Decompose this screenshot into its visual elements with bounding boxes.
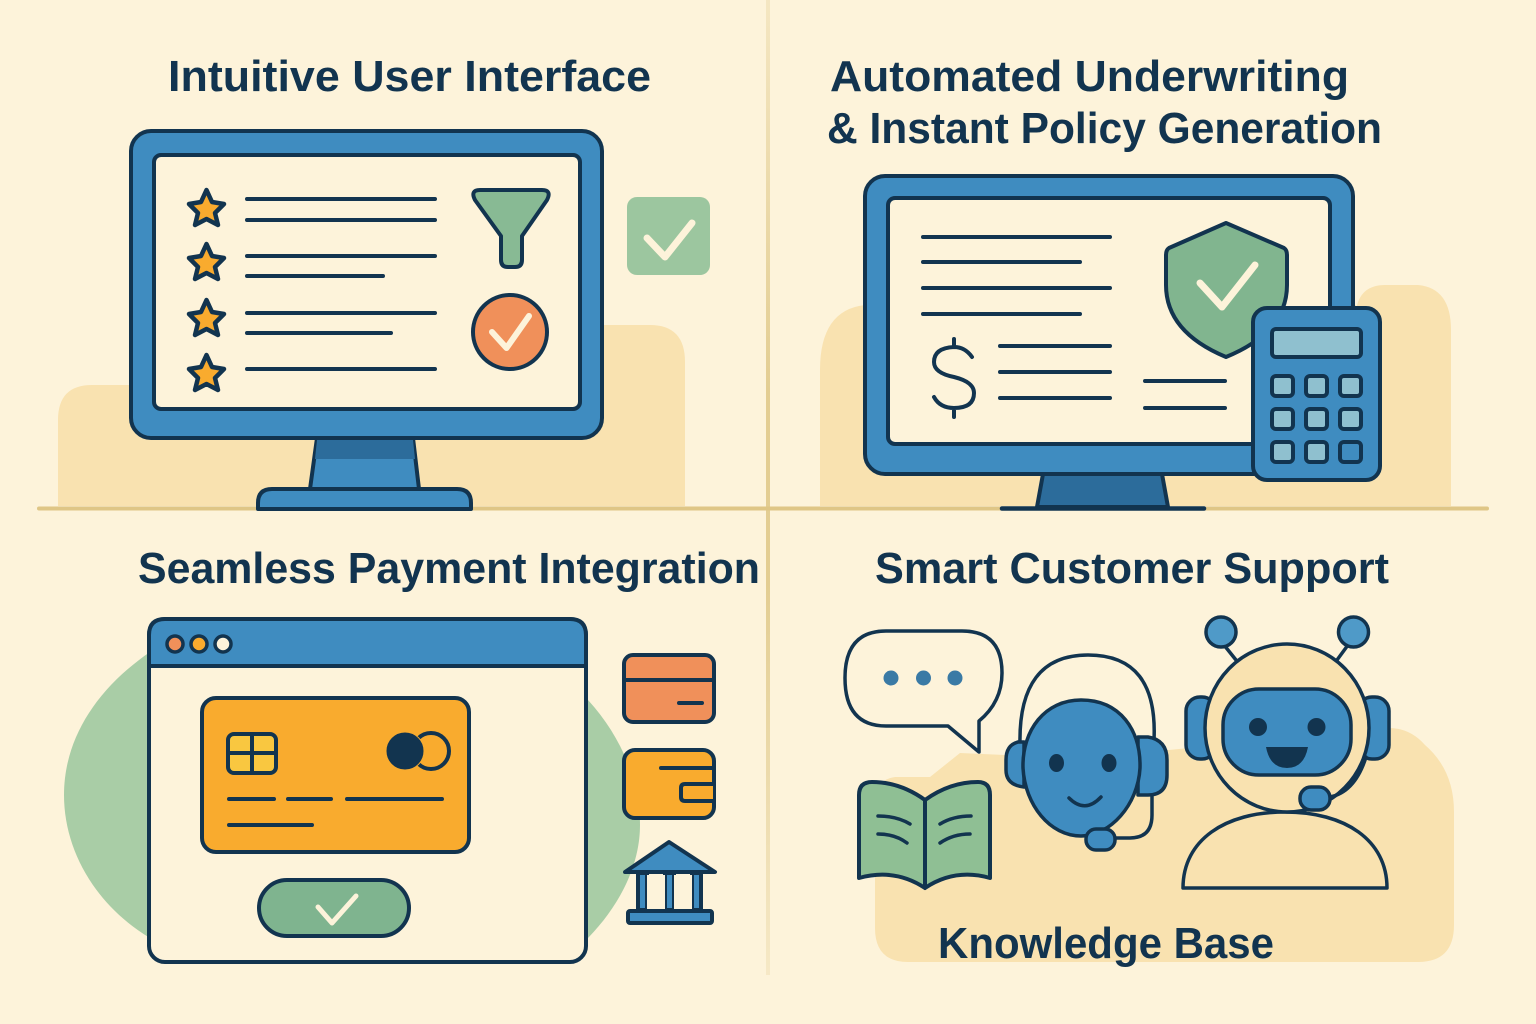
confirm button (259, 880, 409, 936)
background shape (820, 285, 1451, 506)
heading: automated underwriting: Automated Underwriting (830, 52, 1349, 101)
icon: support agent (1006, 655, 1167, 850)
heading: smart customer support: Smart Customer Support (875, 544, 1389, 593)
text lines (923, 237, 1225, 408)
panel: smart customer support (845, 544, 1454, 968)
background circle (64, 652, 640, 938)
icon: robot (1183, 617, 1389, 888)
background shape (58, 325, 685, 506)
icon: bank (625, 842, 715, 923)
icon: wallet (624, 750, 714, 818)
icon: stars (189, 190, 224, 390)
icon: funnel (473, 190, 549, 267)
heading: seamless payment: Seamless Payment Integration (138, 544, 760, 593)
panel: automated underwriting (820, 52, 1451, 508)
heading: automated underwriting (827, 52, 1382, 153)
icon: checkmark tile (627, 197, 710, 275)
label: knowledge base: Knowledge Base (938, 919, 1274, 968)
icon: open book (859, 782, 990, 888)
icon: calculator (1253, 308, 1380, 480)
heading: intuitive user interface: Intuitive User Interface (168, 52, 651, 101)
icon: speech bubble (845, 631, 1002, 752)
icon: orange check badge (473, 295, 547, 369)
monitor (865, 176, 1353, 508)
text lines (247, 199, 435, 369)
panel: intuitive user interface (58, 52, 710, 509)
browser window (149, 619, 586, 962)
dollar sign (934, 339, 974, 417)
heading: automated underwriting: & Instant Policy Generation (827, 104, 1382, 153)
background shape (875, 728, 1454, 962)
icon: shield (1166, 223, 1287, 357)
monitor (131, 131, 602, 509)
panel: seamless payment integration (64, 544, 760, 962)
icon: orange card (624, 655, 714, 722)
credit card (202, 698, 469, 852)
